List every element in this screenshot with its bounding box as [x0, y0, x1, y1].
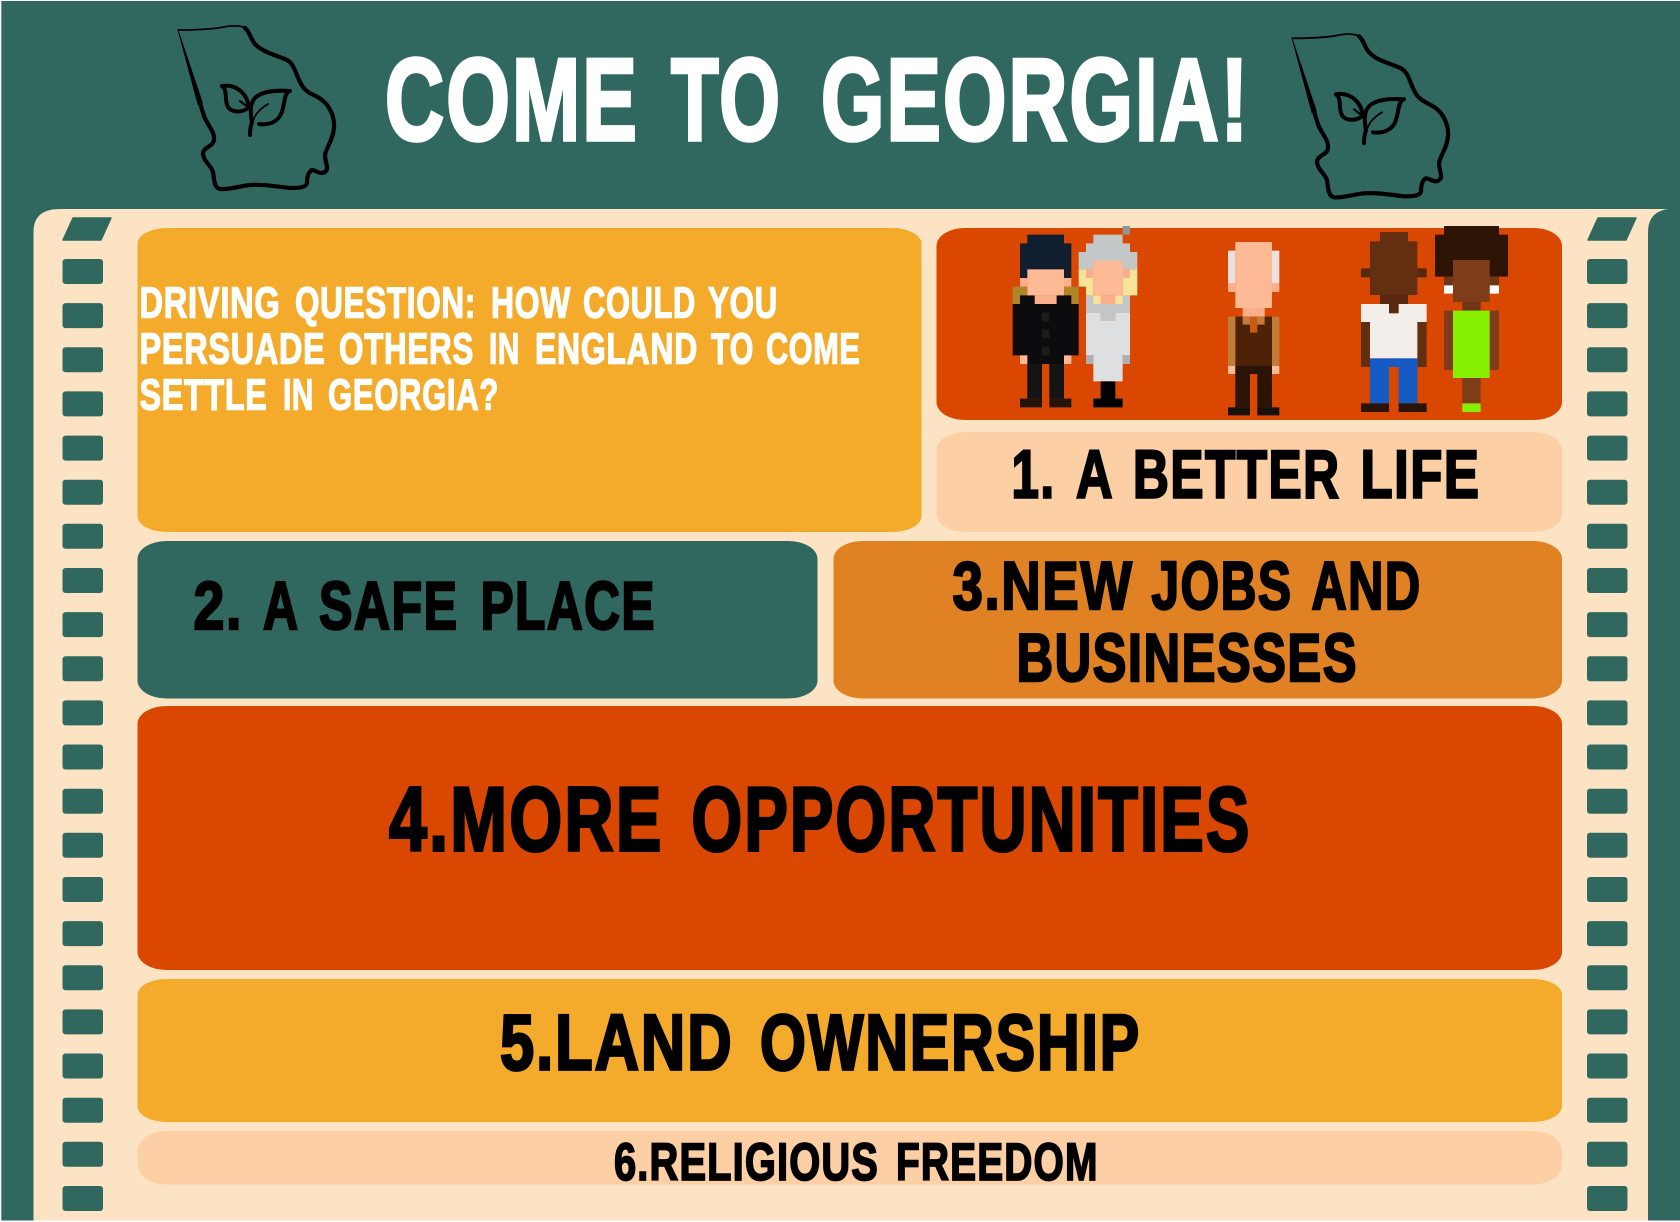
panel: 2. a safe place: 2.	[194, 568, 243, 644]
panel: driving question: YOU	[708, 280, 778, 328]
panel: driving question: GEORGIA?	[328, 372, 499, 420]
panel: driving question: OTHERS	[339, 326, 474, 374]
panel: 6. religious freedom: FREEDOM	[896, 1133, 1098, 1192]
title	[385, 34, 1250, 165]
panel: 5. land ownership: 5.LAND	[500, 998, 734, 1086]
panel: driving question: COME	[766, 326, 860, 374]
icon: pixel settler in green dress	[1435, 226, 1508, 412]
panel: driving question: DRIVING	[140, 280, 280, 328]
panel: 1. a better life: A	[1076, 436, 1114, 512]
panel: driving question: PERSUADE	[140, 326, 326, 374]
icon: pixel settler in white shirt	[1361, 232, 1427, 412]
icon: Georgia state outline with leaf, right	[1292, 34, 1448, 197]
panel: driving question: QUESTION:	[295, 280, 476, 328]
panel: 1. a better life: 1.	[1012, 436, 1056, 512]
panel: settlers illustration	[936, 228, 1562, 420]
panel: 4. more opportunities	[138, 706, 1562, 970]
icon: Georgia state outline with leaf, left	[178, 26, 334, 189]
icon: pixel settler in brown vest	[1228, 242, 1279, 415]
panel: 3. new jobs and businesses: AND	[1312, 548, 1422, 624]
panel: 3. new jobs and businesses: 3.NEW	[952, 548, 1134, 624]
panel: driving question: HOW	[491, 280, 571, 328]
title: COME	[385, 34, 639, 165]
panel: 3. new jobs and businesses: JOBS	[1152, 548, 1292, 624]
panel: 3. new jobs and businesses: BUSINESSES	[1016, 620, 1358, 696]
panel: 2. a safe place: PLACE	[480, 568, 656, 644]
panel: 5. land ownership	[138, 979, 1562, 1122]
panel: 6. religious freedom	[138, 1131, 1562, 1192]
panel: driving question	[138, 228, 922, 532]
panel: 5. land ownership: OWNERSHIP	[760, 998, 1141, 1086]
panel: 1. a better life: BETTER	[1133, 436, 1340, 512]
icon: pixel settler in black coat	[1013, 235, 1079, 407]
panel: 2. a safe place: SAFE	[319, 568, 458, 644]
panel: 2. a safe place: A	[263, 568, 300, 644]
panel: driving question: TO	[711, 326, 754, 374]
panel: 3. new jobs and businesses	[834, 541, 1562, 698]
panel: driving question: ENGLAND	[535, 326, 698, 374]
title: GEORGIA!	[821, 34, 1250, 165]
panel: driving question: IN	[283, 372, 314, 420]
film strip sprocket holes, left	[62, 218, 111, 1211]
panel: driving question: SETTLE	[140, 372, 268, 420]
title: TO	[671, 34, 782, 165]
panel: driving question: COULD	[583, 280, 696, 328]
film strip sprocket holes, right	[1587, 218, 1636, 1211]
panel: 2. a safe place	[138, 541, 818, 698]
panel: 6. religious freedom: 6.RELIGIOUS	[614, 1133, 879, 1192]
icon: pixel settler with white beard	[1079, 226, 1137, 407]
panel: 4. more opportunities: 4.MORE	[389, 770, 664, 870]
panel: 1. a better life: LIFE	[1360, 436, 1480, 512]
panel: 4. more opportunities: OPPORTUNITIES	[692, 770, 1252, 870]
panel: 1. a better life	[936, 432, 1562, 532]
panel: driving question: IN	[489, 326, 520, 374]
